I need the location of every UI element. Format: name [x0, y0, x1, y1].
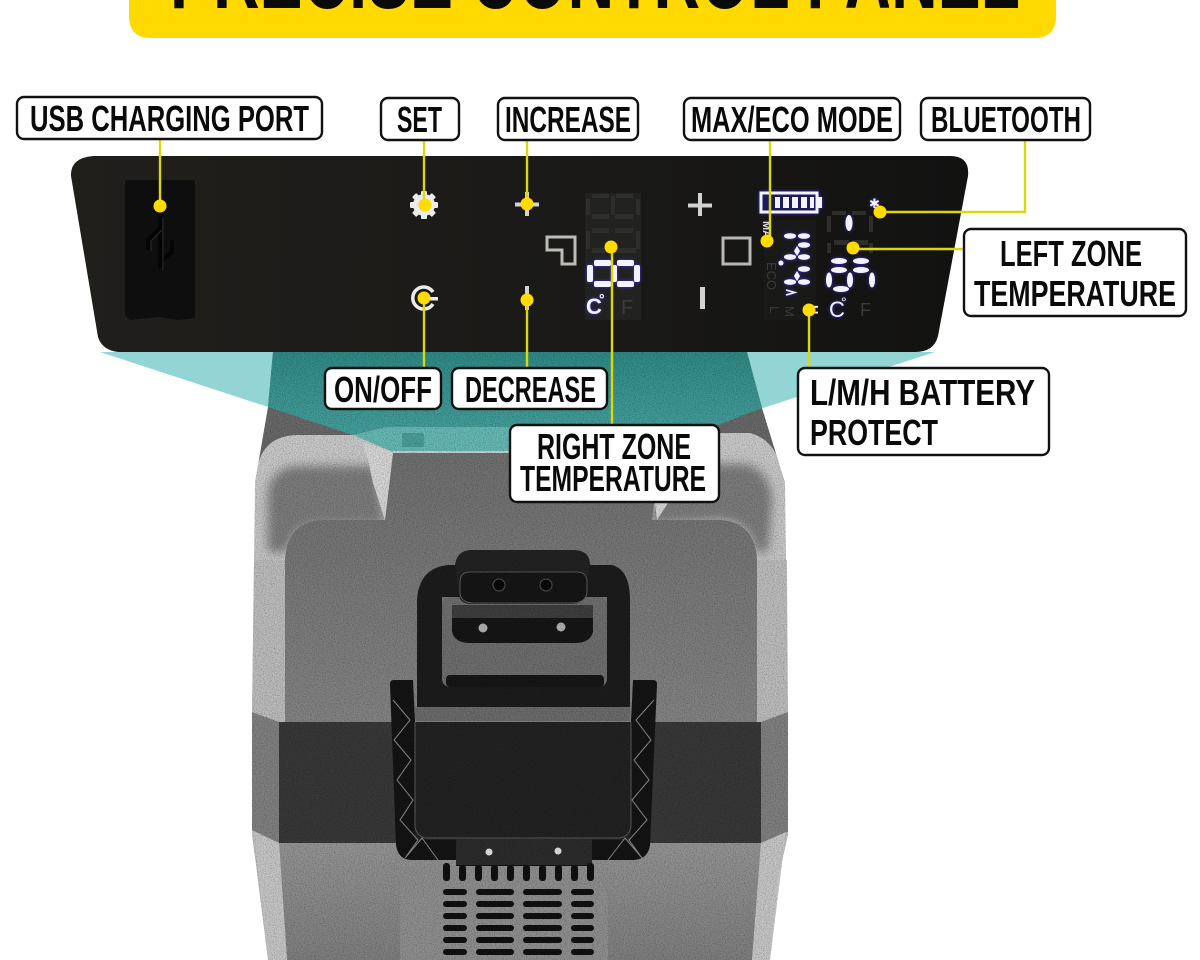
lower body — [279, 843, 761, 960]
label: bluetooth: BLUETOOTH — [931, 99, 1081, 140]
mode display backdrop — [764, 220, 816, 320]
right zone temperature digits — [587, 260, 640, 287]
cooler illustration — [240, 340, 800, 960]
icon: minus — [700, 287, 705, 309]
label: right zone temperature: RIGHT ZONE — [537, 426, 691, 467]
teal control rim — [353, 427, 700, 452]
bottom bracket — [456, 839, 592, 865]
left zone faint digits — [827, 211, 873, 253]
label: decrease: DECREASE — [465, 369, 596, 410]
icon: bluetooth: ✱ — [869, 197, 880, 212]
left zone oval segment — [846, 215, 852, 231]
label: bluetooth — [921, 98, 1090, 140]
label: max eco mode: MAX/ECO MODE — [691, 99, 893, 140]
shoulder shading — [268, 464, 772, 552]
handle strap frame — [390, 680, 657, 866]
dark band — [279, 722, 761, 843]
label: increase: INCREASE — [505, 99, 631, 140]
icon: decrease minus — [525, 286, 529, 310]
icon: set gear — [410, 191, 438, 219]
title banner — [129, 0, 1056, 38]
vents — [443, 863, 594, 955]
handle plate — [452, 605, 593, 643]
mode display digits — [778, 233, 810, 295]
light teal projection beam — [100, 352, 935, 408]
small mode labels: L — [767, 306, 782, 313]
label: L/M/H battery protect — [798, 368, 1049, 455]
small mode labels: MAX — [760, 221, 772, 246]
left zone celsius: C — [829, 297, 845, 322]
handle strip below grip — [415, 707, 630, 721]
leader lines and dots — [154, 139, 1025, 425]
label: USB charging port: USB CHARGING PORT — [30, 98, 309, 139]
label: set: SET — [397, 99, 442, 140]
left zone celsius: ° — [841, 294, 847, 310]
cooler body — [252, 433, 788, 960]
control panel — [71, 156, 968, 352]
label: left zone temperature — [964, 229, 1186, 316]
icon: zone bracket — [547, 237, 575, 264]
label: decrease — [452, 368, 607, 410]
icon: USB port cover — [125, 180, 195, 320]
right zone faint digits — [585, 193, 641, 320]
right zone celsius: C — [586, 294, 602, 319]
label: increase — [498, 98, 638, 140]
icon: increase plus — [515, 192, 539, 216]
handle top bracket — [455, 550, 590, 604]
surface texture — [240, 340, 800, 960]
icon: mode square — [723, 238, 750, 264]
label: L/M/H battery protect: L/M/H BATTERY — [810, 372, 1035, 413]
right zone faint fahrenheit: F — [621, 297, 633, 319]
label: left zone temperature: LEFT ZONE — [1000, 233, 1142, 274]
small mode labels: ECO — [764, 262, 779, 290]
icon: on off — [413, 287, 438, 309]
label: right zone temperature — [510, 425, 719, 502]
label: on off: ON/OFF — [334, 369, 432, 410]
icon: battery — [761, 193, 822, 212]
label: L/M/H battery protect: PROTECT — [810, 412, 938, 453]
small mode labels: M — [782, 306, 797, 317]
faint fahrenheit: F — [860, 300, 871, 320]
right zone celsius: ° — [599, 291, 605, 307]
rear shell — [255, 352, 785, 483]
teal lid back — [268, 352, 762, 435]
label: right zone temperature: TEMPERATURE — [520, 458, 706, 499]
handle grip — [417, 565, 630, 707]
small mode labels: H — [806, 305, 821, 314]
small mode labels — [760, 221, 821, 317]
icon: plus — [688, 193, 712, 216]
left zone temperature digits — [826, 258, 875, 292]
lid recess — [285, 453, 757, 722]
